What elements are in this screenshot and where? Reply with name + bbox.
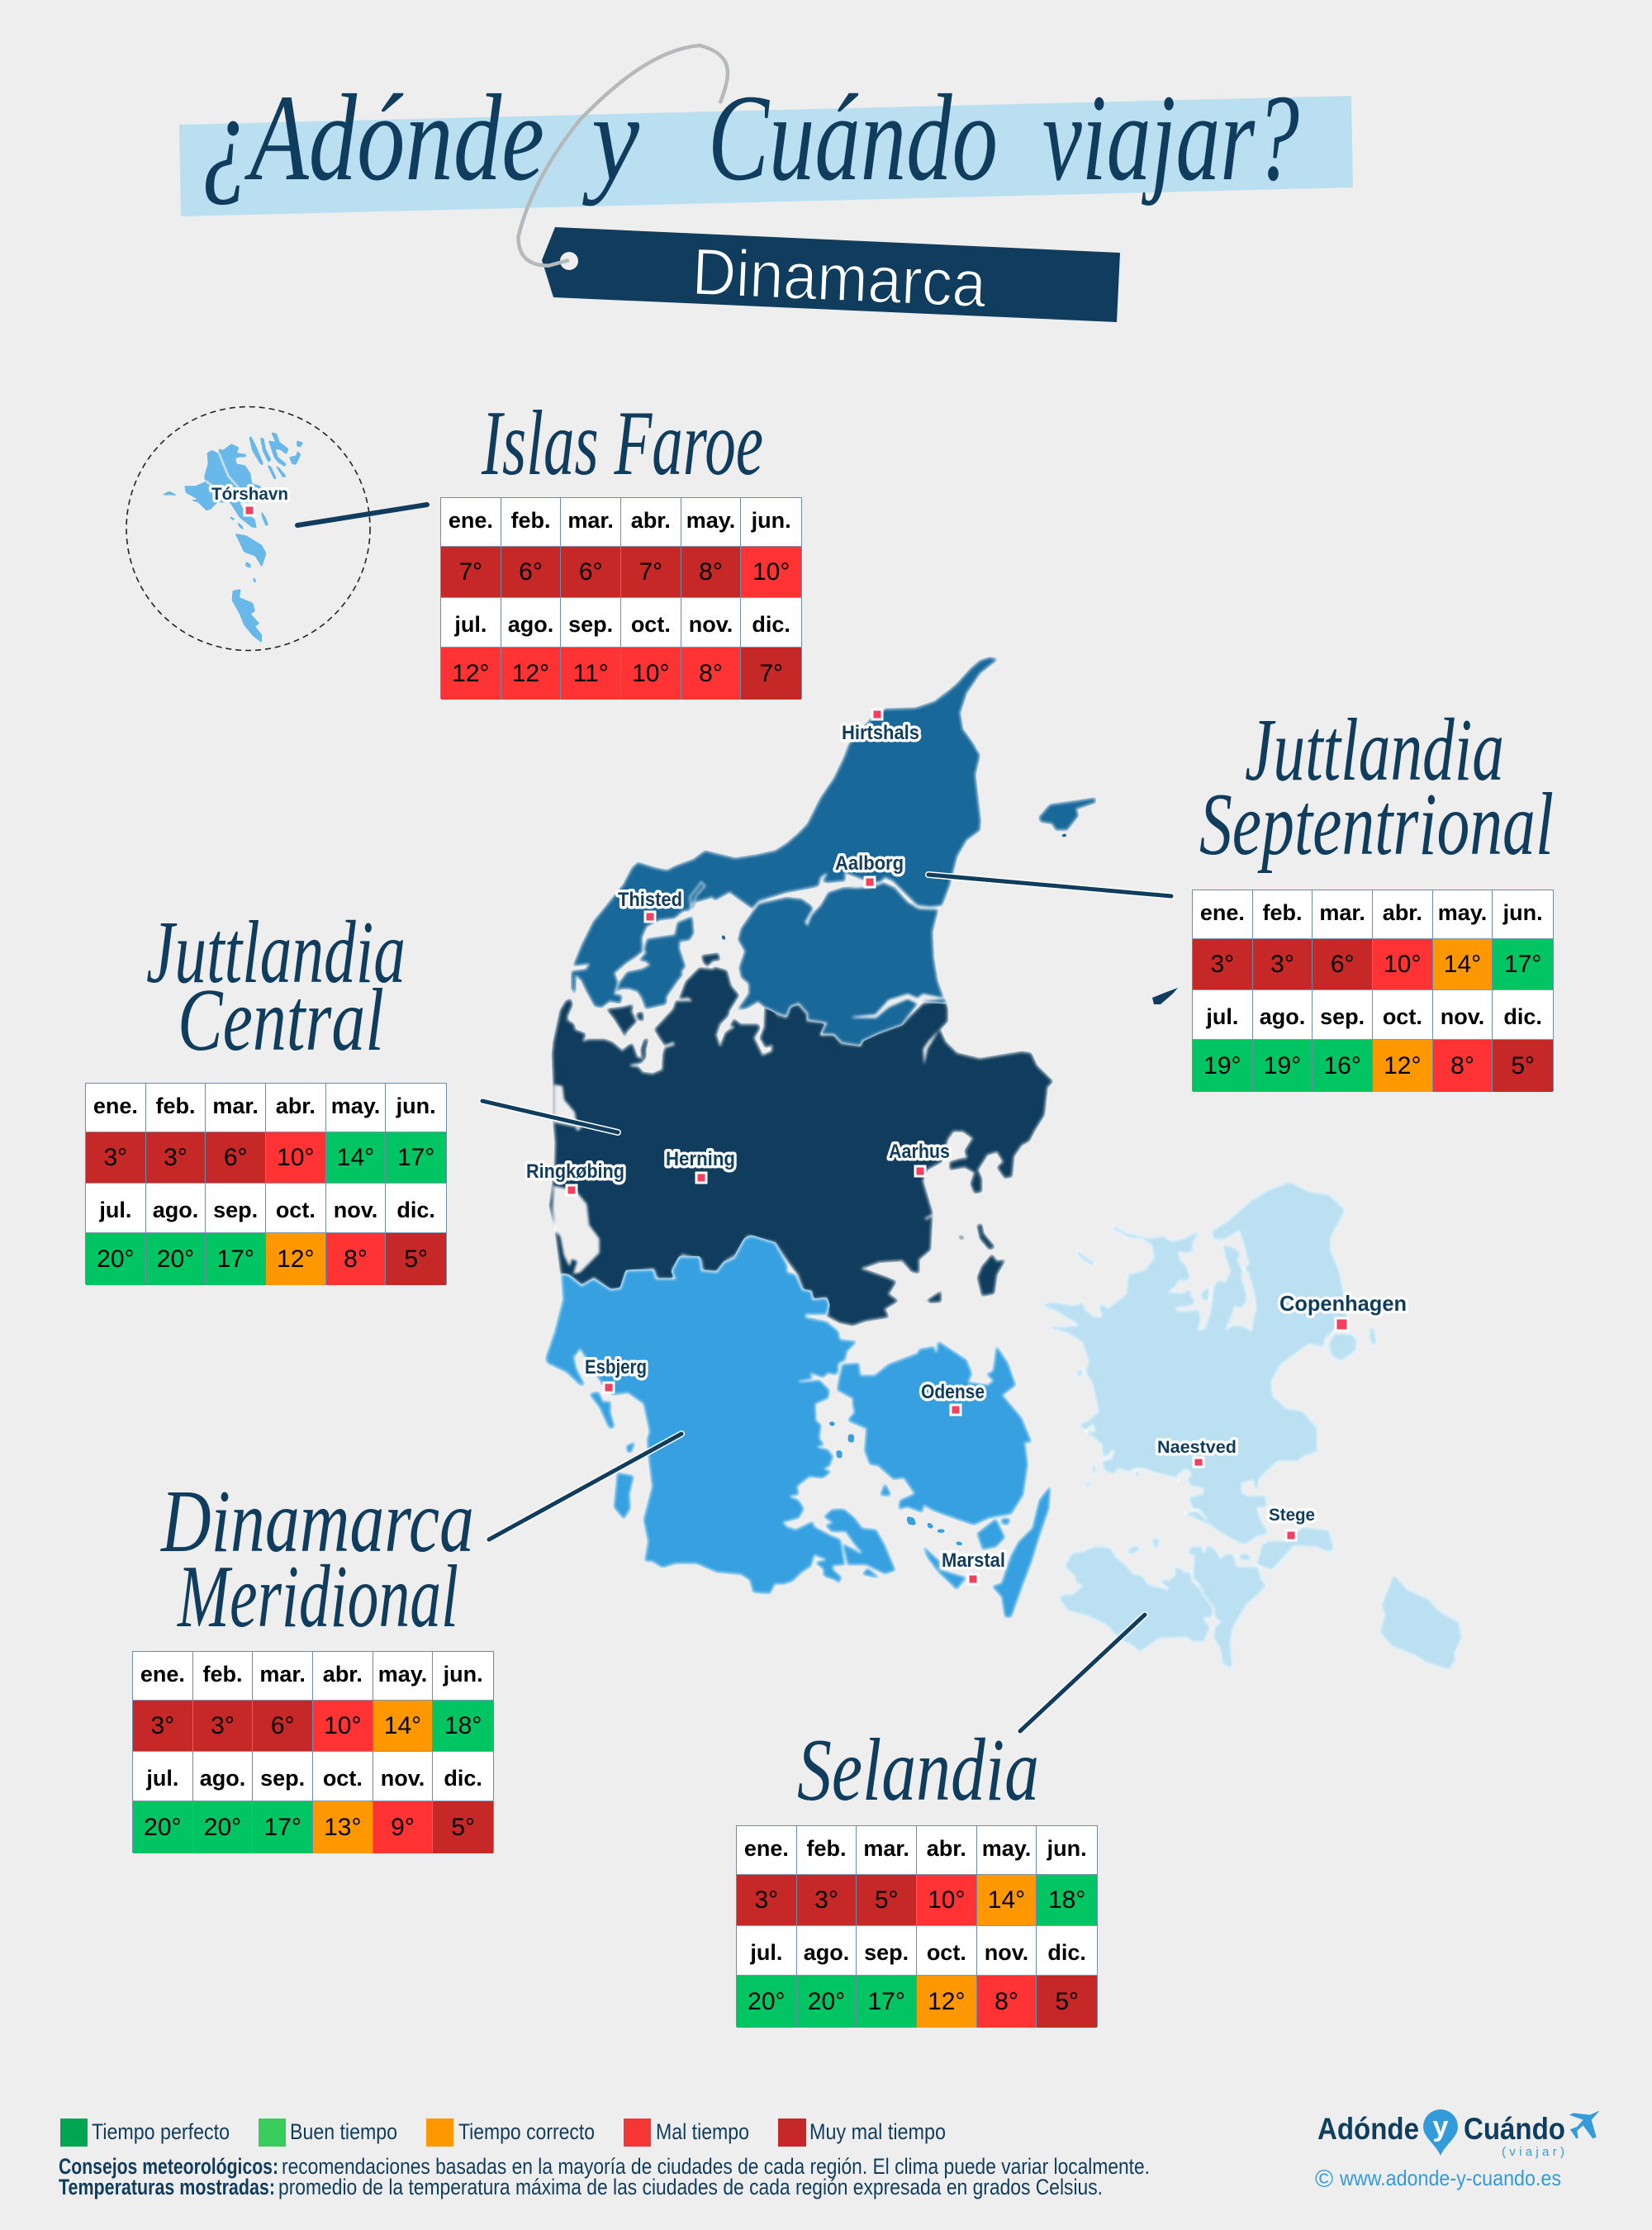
table: Islas Faroe: abr. [631,507,671,532]
legend: Buen tiempo [259,2118,397,2147]
table: Dinamarca Meridional: abr. [323,1662,363,1687]
table: Selandia: 18° [1048,1886,1085,1913]
table: Dinamarca Meridional: 3° [150,1711,174,1739]
table: Jutlandia Septentrional: 17° [1504,950,1541,978]
table: Jutlandia Central: dic. [396,1198,435,1222]
website link: www.adonde-y-cuando.es [1339,2166,1561,2190]
heading: Jutlandia Septentrional [1199,701,1554,874]
logo: Adónde y Cuándo [1317,2109,1600,2159]
table: Dinamarca Meridional: feb. [202,1662,243,1687]
legend: Tiempo correcto: Tiempo correcto [458,2119,595,2144]
table: Dinamarca Meridional: may. [378,1662,427,1687]
table: Dinamarca Meridional: 3° [211,1711,235,1739]
table: Islas Faroe: may. [686,507,735,532]
table: Selandia: ago. [804,1940,849,1965]
city: Ringkøbing [526,1160,624,1195]
table: Selandia: 20° [748,1987,786,2015]
tag: Dinamarca: Dinamarca [691,235,988,321]
table: Selandia: 10° [928,1886,965,1913]
table: Jutlandia Central: ago. [153,1198,198,1222]
table: Islas Faroe: dic. [752,612,790,637]
table: Jutlandia Septentrional: 10° [1384,950,1421,978]
table: Dinamarca Meridional: dic. [444,1766,482,1791]
city: Esbjerg [585,1356,647,1393]
notes: consejos meteorológicos [59,2154,1150,2179]
heading: Jutlandia Central: Juttlandia [146,904,406,1002]
legend: Tiempo correcto [426,2118,595,2147]
title banner [179,96,1353,216]
table: Jutlandia Central: 3° [103,1143,127,1171]
table: Jutlandia Central: 10° [277,1143,314,1171]
table: Jutlandia Central: 12° [277,1245,314,1272]
legend: Mal tiempo [624,2118,749,2147]
tag: Dinamarca [542,227,1120,322]
table: Dinamarca Meridional: 14° [384,1711,421,1739]
city: Aarhus [889,1141,950,1176]
table: Selandia: 5° [1055,1987,1079,2015]
title [202,69,1299,206]
table: Dinamarca Meridional: 5° [451,1814,475,1840]
table: Jutlandia Central: oct. [276,1198,316,1222]
legend: Mal tiempo: Mal tiempo [656,2119,749,2144]
table: Jutlandia Central: feb. [155,1094,195,1118]
map: Dinamarca Meridional region [546,1236,1051,1617]
table: Islas Faroe: 11° [573,659,609,687]
table: Dinamarca Meridional: nov. [381,1766,425,1791]
city: Naestved [1157,1438,1237,1467]
notes: temperaturas mostradas [59,2175,1103,2199]
heading: Dinamarca Meridional: Dinamarca [159,1473,474,1571]
table: Jutlandia Septentrional: may. [1438,900,1487,925]
table: Dinamarca Meridional: 9° [391,1814,415,1840]
logo: Adónde y Cuándo: Adónde [1317,2112,1419,2146]
arrow: Jutlandia Septentrional callout [928,875,1171,896]
table: Islas Faroe: 7° [638,558,662,585]
table: Dinamarca Meridional: 6° [271,1711,294,1739]
logo: Adónde y Cuándo: (viajar) [1502,2145,1564,2159]
table: Jutlandia Septentrional: 6° [1331,950,1355,978]
table: Jutlandia Central: 5° [404,1245,428,1272]
table: Dinamarca Meridional: ago. [200,1766,245,1791]
table: Selandia: 12° [928,1987,965,2015]
table: Jutlandia Septentrional: oct. [1383,1004,1422,1029]
legend: Muy mal tiempo [778,2118,946,2147]
city: Thisted [618,889,682,922]
title: Cuándo [708,69,998,206]
table: Selandia: feb. [806,1835,846,1860]
table: Selandia: dic. [1047,1940,1086,1965]
table: Islas Faroe: jun. [752,507,791,532]
table: Islas Faroe: 8° [699,659,723,687]
table: Dinamarca Meridional: jul. [146,1766,178,1791]
heading: Jutlandia Central: Central [178,971,384,1070]
notes: consejos meteorológicos: Consejos meteorológicos: [59,2154,278,2179]
table: Islas Faroe: 7° [458,558,482,585]
table: Selandia: abr. [927,1835,966,1860]
table: Dinamarca Meridional: 13° [324,1814,362,1840]
legend: Buen tiempo: Buen tiempo [290,2119,397,2144]
table: Islas Faroe [440,497,802,699]
city: Naestved: Naestved [1157,1438,1237,1457]
map: Faroe Islands [162,432,303,643]
table: Jutlandia Central: 20° [157,1245,194,1272]
city: Marstal [942,1549,1005,1584]
title: ¿Adónde [202,69,544,206]
table: Islas Faroe: oct. [631,612,671,637]
table: Selandia: sep. [864,1940,909,1965]
table: Jutlandia Central: jul. [99,1198,131,1222]
table: Jutlandia Septentrional: jun. [1503,900,1543,925]
table: Islas Faroe: 12° [512,659,549,687]
table: Dinamarca Meridional: 20° [144,1814,182,1840]
table: Jutlandia Central: 8° [344,1245,368,1272]
city: Thisted: Thisted [618,889,682,911]
table: Dinamarca Meridional: 17° [263,1814,301,1840]
city: Marstal: Marstal [942,1549,1005,1572]
table: Jutlandia Septentrional: nov. [1441,1004,1484,1029]
table: Dinamarca Meridional: oct. [323,1766,363,1791]
legend: Tiempo perfecto: Tiempo perfecto [92,2119,230,2144]
city: Tórshavn: Tórshavn [211,485,288,504]
table: Jutlandia Septentrional: 16° [1323,1052,1361,1079]
city: Herning: Herning [666,1148,735,1170]
table: Selandia: 17° [867,1987,905,2015]
map: Jutlandia Central region [549,953,1053,1326]
map: Isla Anholt [1152,988,1178,1004]
table: Islas Faroe: 12° [452,659,490,687]
table: Islas Faroe: ene. [449,507,493,532]
table: Jutlandia Septentrional: ene. [1200,900,1245,925]
table: Jutlandia Central: 6° [224,1143,248,1171]
city: Esbjerg: Esbjerg [585,1356,647,1378]
city: Stege: Stege [1269,1506,1315,1525]
table: Selandia: 3° [814,1886,838,1913]
city: Hirtshals: Hirtshals [842,722,919,744]
city: Ringkøbing: Ringkøbing [526,1160,624,1183]
city: Aarhus: Aarhus [889,1141,950,1163]
heading: Islas Faroe: Islas Faroe [481,392,763,495]
notes: temperaturas mostradas: Temperaturas mostradas: [59,2175,275,2199]
city: Stege [1269,1506,1315,1540]
map: Selandia region [1042,1181,1462,1670]
city: Aalborg: Aalborg [835,852,904,875]
table: Islas Faroe: mar. [567,507,614,532]
table: Jutlandia Central: nov. [334,1198,377,1222]
map: Jutlandia Septentrional region [572,657,1095,1046]
table: Selandia: ene. [744,1835,789,1860]
table: Dinamarca Meridional: 20° [204,1814,241,1840]
table: Selandia: 8° [995,1987,1018,2015]
table: Islas Faroe: jul. [454,612,487,637]
city: Hirtshals [842,709,919,744]
table: Jutlandia Septentrional: 3° [1210,950,1234,978]
legend: Tiempo perfecto [60,2118,230,2147]
logo: Adónde y Cuándo: y [1433,2111,1449,2142]
heading: Jutlandia Septentrional: Juttlandia [1245,701,1504,799]
tag string [518,45,728,266]
table: Jutlandia Central: 17° [397,1143,434,1171]
table: Selandia: nov. [985,1940,1028,1965]
table: Islas Faroe: feb. [510,507,550,532]
table: Jutlandia Central: 14° [337,1143,374,1171]
legend: Muy mal tiempo: Muy mal tiempo [809,2119,946,2144]
table: Selandia: 20° [808,1987,845,2015]
dashed circle: Faroe inset [126,406,370,651]
table: Jutlandia Septentrional: sep. [1320,1004,1365,1029]
arrow: Selandia callout [1020,1615,1145,1731]
table: Selandia: jul. [750,1940,782,1965]
table: Jutlandia Septentrional: 5° [1511,1052,1535,1079]
table: Jutlandia Septentrional: feb. [1262,900,1302,925]
table: Dinamarca Meridional: jun. [444,1662,483,1687]
city: Odense [921,1381,985,1415]
table: Dinamarca Meridional: mar. [259,1662,306,1687]
table: Jutlandia Central: jun. [396,1094,436,1118]
heading: Dinamarca Meridional: Meridional [177,1548,458,1646]
table: Jutlandia Central: sep. [213,1198,258,1222]
table: Jutlandia Central: 3° [164,1143,188,1171]
table: Jutlandia Central: may. [331,1094,380,1118]
table: Selandia: 14° [988,1886,1025,1913]
table: Dinamarca Meridional: 18° [444,1711,482,1739]
table: Jutlandia Septentrional: 19° [1203,1052,1241,1079]
table: Selandia: 5° [875,1886,899,1913]
table: Islas Faroe: nov. [689,612,733,637]
table: Jutlandia Central: mar. [212,1094,259,1118]
logo: Adónde y Cuándo: Cuándo [1464,2112,1565,2146]
table: Selandia: 3° [754,1886,778,1913]
table: Jutlandia Central: 20° [97,1245,135,1272]
city: Herning [666,1148,735,1183]
table: Selandia [736,1825,1098,2027]
table: Islas Faroe: 7° [759,659,783,687]
city: Odense: Odense [921,1381,985,1403]
table: Jutlandia Septentrional: 12° [1384,1052,1421,1079]
title: y [582,69,639,206]
heading: Selandia: Selandia [797,1721,1039,1820]
table: Jutlandia Septentrional: ago. [1260,1004,1305,1029]
table: Islas Faroe: 10° [752,558,790,585]
notes: consejos meteorológicos: recomendaciones basadas en la mayoría de ciudades de cada región. El clima puede variar localmente. [282,2154,1150,2179]
table: Selandia: mar. [863,1835,909,1860]
heading: Dinamarca Meridional [159,1473,474,1646]
table: Dinamarca Meridional: ene. [140,1662,185,1687]
table: Jutlandia Central: 17° [216,1245,254,1272]
table: Selandia: jun. [1047,1835,1087,1860]
table: Jutlandia Septentrional: abr. [1383,900,1422,925]
table: Jutlandia Central: ene. [93,1094,138,1118]
table: Jutlandia Septentrional: jul. [1206,1004,1238,1029]
title: viajar? [1042,69,1299,206]
table: Jutlandia Septentrional [1192,890,1554,1091]
table: Jutlandia Septentrional: 19° [1264,1052,1301,1079]
heading: Jutlandia Central [146,904,406,1070]
city: Copenhagen: Copenhagen [1279,1291,1407,1316]
table: Islas Faroe: sep. [568,612,613,637]
website link: © [1315,2166,1333,2193]
table: Dinamarca Meridional [132,1651,494,1853]
city: Tórshavn [211,485,288,515]
table: Islas Faroe: ago. [508,612,553,637]
table: Selandia: oct. [927,1940,966,1965]
table: Jutlandia Septentrional: 3° [1270,950,1294,978]
table: Jutlandia Septentrional: 8° [1450,1052,1474,1079]
arrow: Dinamarca Meridional callout [489,1434,681,1540]
table: Islas Faroe: 6° [519,558,543,585]
table: Islas Faroe: 6° [579,558,603,585]
city: Aalborg [835,852,904,887]
table: Islas Faroe: 8° [699,558,723,585]
table: Jutlandia Septentrional: dic. [1503,1004,1542,1029]
notes: temperaturas mostradas: promedio de la temperatura máxima de las ciudades de cada región expresada en grados Celsius. [278,2175,1103,2199]
table: Jutlandia Septentrional: 14° [1444,950,1481,978]
table: Jutlandia Central [85,1083,447,1284]
arrow: Jutlandia Central callout [482,1101,618,1132]
table: Dinamarca Meridional: sep. [260,1766,305,1791]
table: Dinamarca Meridional: 10° [324,1711,362,1739]
table: Jutlandia Central: abr. [276,1094,316,1118]
table: Jutlandia Septentrional: mar. [1319,900,1365,925]
table: Islas Faroe: 10° [632,659,669,687]
city: Copenhagen [1279,1291,1407,1331]
arrow: Faroe callout [297,505,427,525]
table: Selandia: may. [982,1835,1031,1860]
